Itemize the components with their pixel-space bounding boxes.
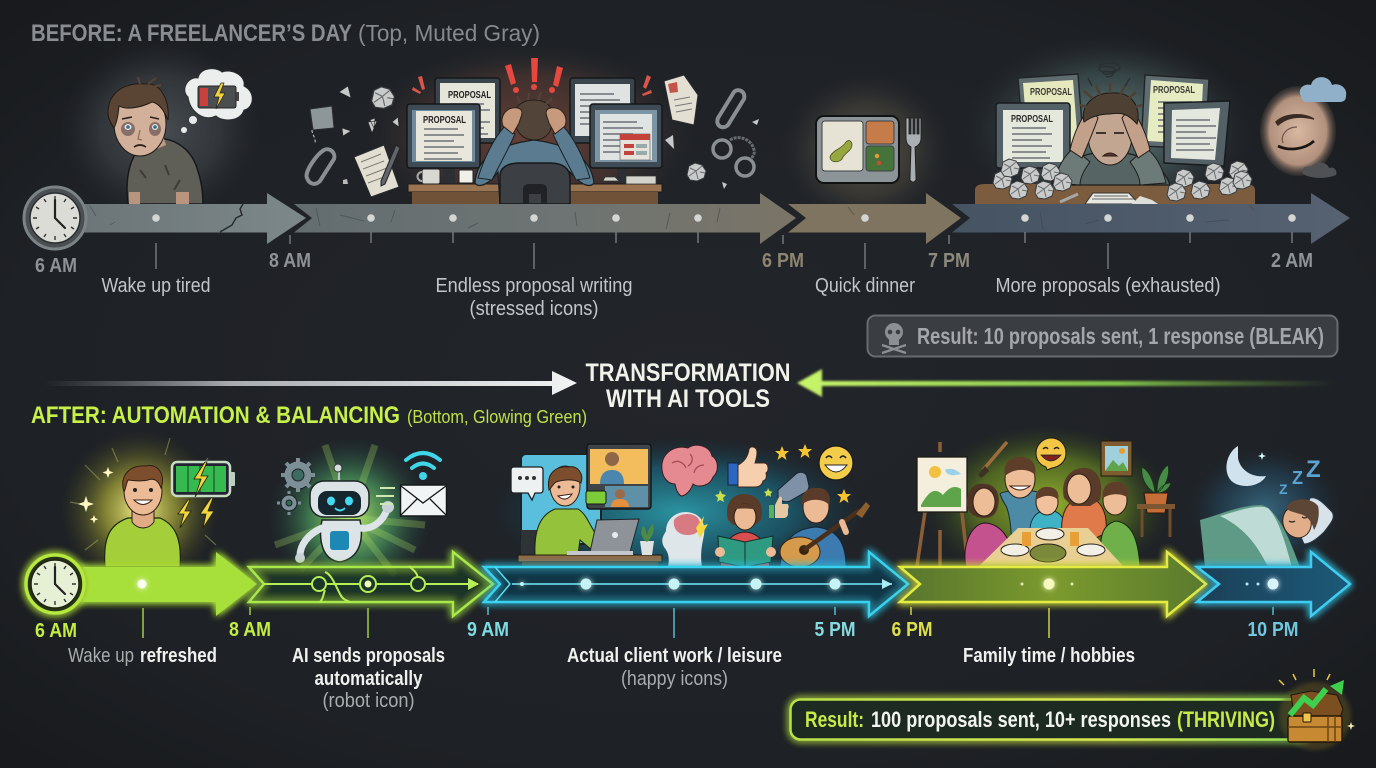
arrow: from before toward center [44,371,577,395]
time labels: before: 8 AM [269,250,311,272]
icon: laughing emoji bubble [1036,438,1066,470]
illustration: refreshed freelancer [60,430,235,590]
text: sleeping Zzz: Z [1306,456,1321,483]
captions: after: automatically [314,668,423,690]
monitor: front right [590,104,662,183]
segment: yellow family [900,552,1206,616]
segment: solid green [70,552,257,616]
illustration: family dinner and hobbies [917,425,1175,585]
icon: brain [662,445,717,496]
time labels: before [35,250,1313,277]
icon: stars [715,444,851,503]
monitor: back left: PROPOSAL [448,90,491,101]
text: sleeping Zzz: Z [1292,468,1303,488]
icon: paintbrush [978,442,1007,478]
icon: clock 6 AM muted [24,187,86,249]
time labels: after: 10 PM [1248,619,1298,641]
chair [500,163,570,204]
icon: coffee mugs and papers [418,169,656,184]
captions: before: Wake up tired [102,275,210,297]
monitor: front right [1164,101,1230,166]
heading: transformation [586,359,790,413]
monitor: back right [570,78,635,143]
text: sleeping Zzz [1279,456,1321,497]
illustration: client work and leisure [490,437,870,587]
captions: after: Family time / hobbies [963,645,1135,667]
arrow: from after toward center [797,369,1336,397]
captions: after [68,645,1135,712]
captions: before: Endless proposal writing [436,275,632,297]
captions: after: (robot icon) [322,690,414,712]
monitor and desk with working freelancer [518,454,662,567]
callout: thriving result [790,669,1355,750]
text: sleeping Zzz: Z [1279,481,1288,497]
monitor: back right: PROPOSAL [1153,85,1195,96]
monitor: back left: PROPOSAL [1030,87,1072,98]
icon: skull and crossbones [882,323,906,353]
captions: after: Actual client work / leisure [567,645,782,667]
figure: freelancer from behind, hands on head [475,92,594,204]
heading: transformation: TRANSFORMATION [586,359,790,387]
segment: cyan outline [484,552,908,616]
icon: full battery with bolts [172,462,235,528]
icon: wifi [406,453,440,478]
time labels: after: 6 PM [892,619,932,641]
time labels: before: 6 AM [35,255,77,277]
monitor: front left: PROPOSAL [1011,114,1053,125]
figure: reading woman [715,494,776,567]
illustration: peaceful sleep [1185,445,1345,575]
captions: before [102,275,1220,320]
icon: crescent moon [1226,446,1266,486]
captions: after: refreshed [140,645,217,667]
icon: envelope [376,485,446,516]
monitor: back left [1018,74,1084,151]
icon: thumbs up [728,447,768,487]
icon: treasure chest with growth arrow [1279,669,1355,750]
panel: transformation divider [44,359,1336,413]
captions: before: (stressed icons) [470,298,598,320]
icon: smiling emoji [819,446,853,480]
figure: head in hands [1052,83,1170,185]
monitor: front left: PROPOSAL [423,114,466,126]
segment: circuit green outline [249,552,493,616]
monitor: back right [1141,75,1209,149]
time labels: before: 6 PM [762,250,804,272]
time labels: after [35,619,1298,642]
timeline arrows: before [70,193,1350,269]
icon: clock 6 AM glowing [26,555,84,613]
time labels: after: 5 PM [814,619,856,641]
captions: after: Wake up [68,645,134,667]
heading: after: (Bottom, Glowing Green) [407,407,587,427]
captions: before: More proposals (exhausted) [996,275,1220,297]
heading: transformation: WITH AI TOOLS [606,385,770,413]
heading: before: BEFORE: A FREELANCER’S DAY [31,20,352,47]
figure: family around table [965,457,1140,567]
time labels: after: 9 AM [467,619,509,641]
segment: blue night [1197,552,1350,616]
icon: low battery thought cloud [181,69,252,133]
tick marks: after [143,607,1273,638]
time labels: after: 6 AM [35,620,77,642]
icon: brain head profile [662,512,708,567]
monitor: back left [435,78,500,143]
captions: after: (happy icons) [621,668,728,690]
panel: before timeline [24,20,1350,356]
icon: small thumbs up [769,497,789,518]
time labels: before: 7 PM [928,250,970,272]
illustration: quick dinner tray and fork [781,72,951,228]
icon: cloud [1300,77,1346,102]
icons: scattered debris left [307,86,400,197]
illustration: late-night moon face and clouds [1260,77,1346,178]
illustration: tired freelancer [60,40,260,220]
monitor: front left [996,103,1070,168]
illustration: stressed at desk with scattered debris [307,45,759,225]
desk [408,184,662,204]
illustration: exhausted freelancer with crumpled paper [963,35,1255,225]
heading: before: (Top, Muted Gray) [358,20,540,46]
figure: sleeping person in bed [1200,498,1333,567]
callout: thriving result: (THRIVING) [1177,707,1275,732]
figure: guitarist [780,488,870,567]
icon: dizzy spiral [1088,63,1130,86]
monitor: front left [407,104,480,183]
icon: potted plant [1137,465,1175,537]
captions: before: Quick dinner [815,275,915,297]
illustration: robot sending proposals [268,436,446,600]
figure: robot [295,464,394,563]
time labels: before: 2 AM [1271,250,1313,272]
icon: microphone [778,472,809,502]
captions: after: AI sends proposals [292,645,445,667]
callout: bleak result [868,316,1338,356]
panel: after timeline [26,402,1355,750]
time labels: after: 8 AM [229,619,271,641]
heading: after: AFTER: AUTOMATION & BALANCING [31,402,400,429]
icon: framed picture [1101,441,1132,476]
timeline arrows: after [70,552,1350,616]
icon: speech bubble [511,467,543,500]
icon: gears [277,458,315,515]
icons: scattered debris right [664,75,759,189]
icon: red exclamation marks [412,58,652,96]
icon: easel with painting [917,442,968,566]
callout: thriving result: 100 proposals sent, 10+ responses [871,707,1171,732]
icon: video call windows [586,444,651,509]
callout: thriving result: Result: [805,707,864,732]
crumpled paper piles [993,159,1252,204]
